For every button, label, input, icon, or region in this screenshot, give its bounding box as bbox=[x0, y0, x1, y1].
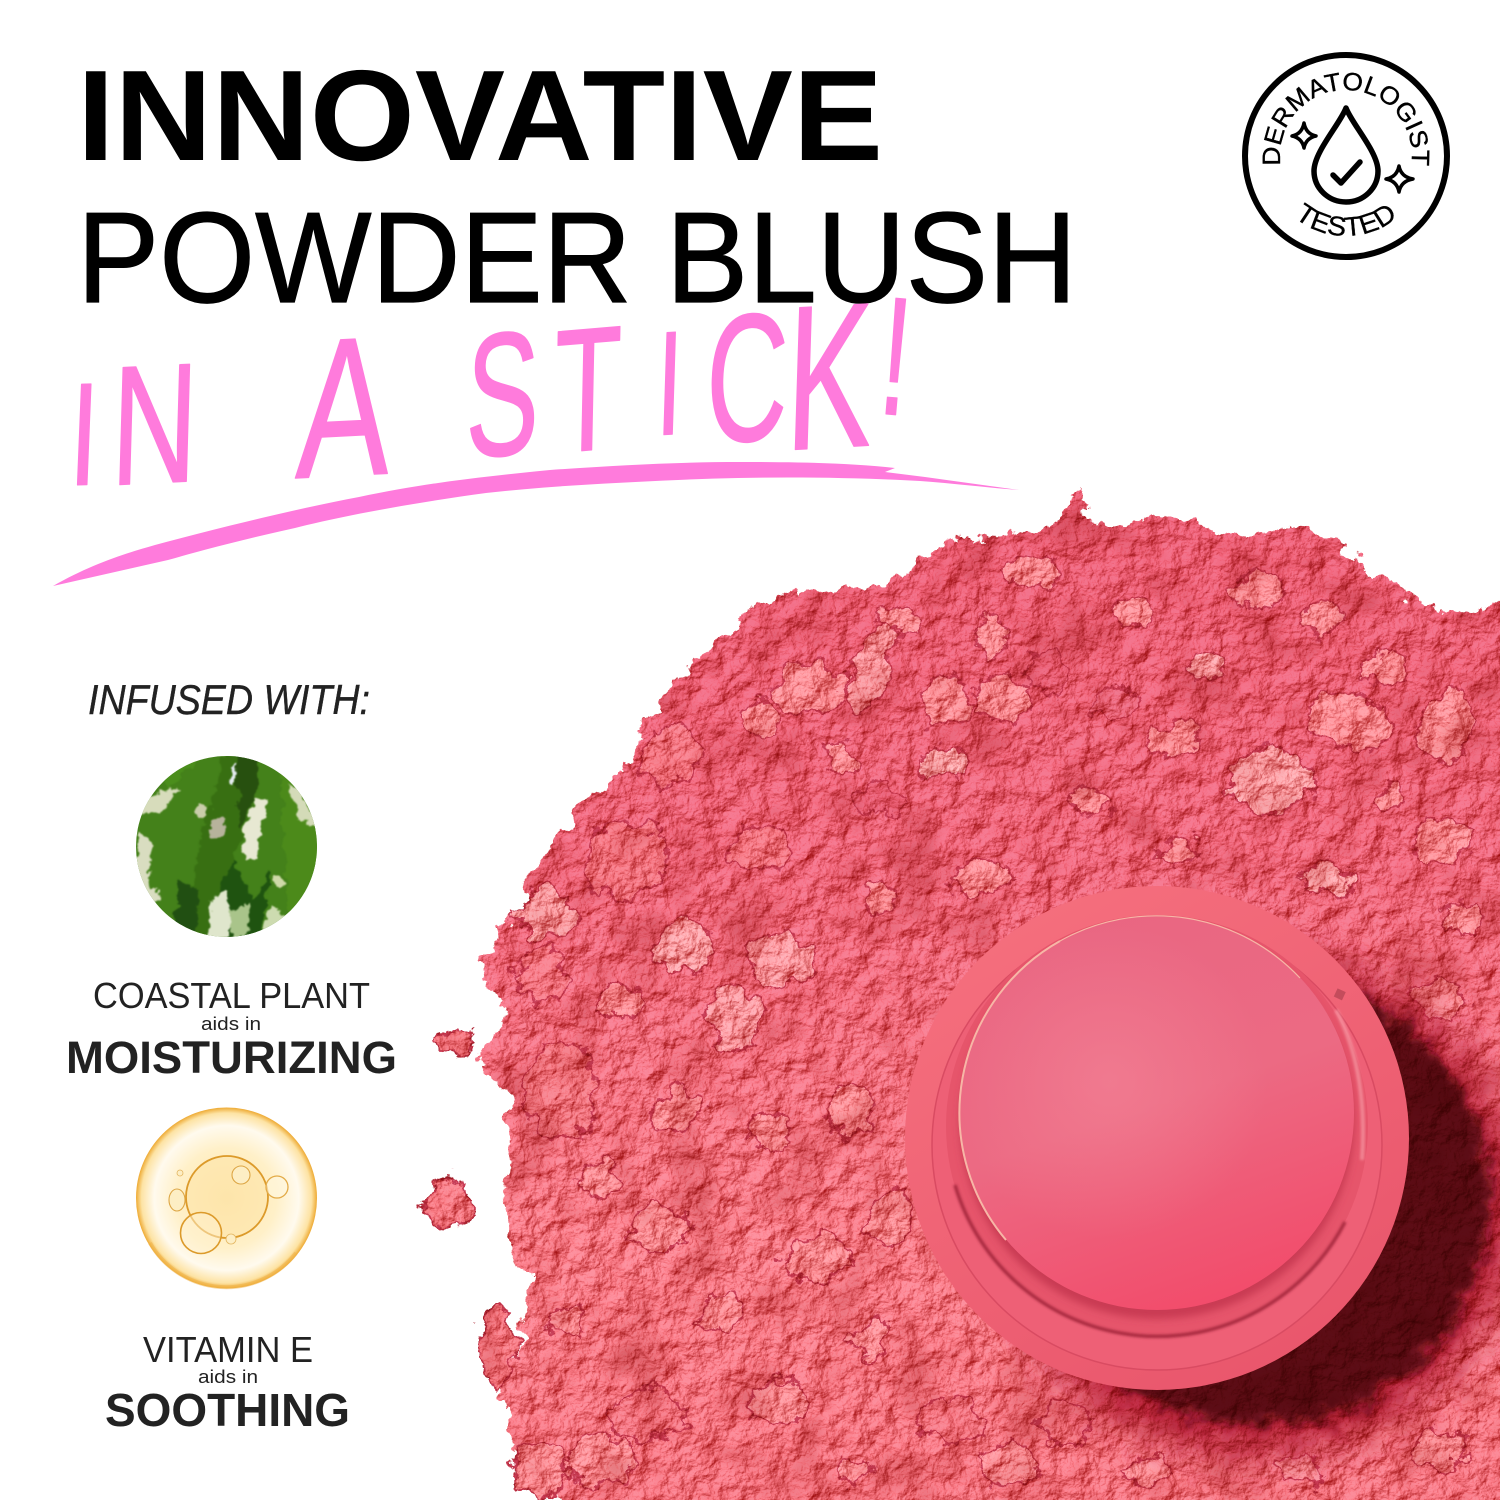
script word: stick: I bbox=[651, 300, 689, 467]
script word: stick: S bbox=[458, 294, 548, 496]
headline line 1: INNOVATIVE bbox=[77, 44, 883, 188]
script word: in: N bbox=[104, 328, 205, 522]
benefit: SOOTHING bbox=[105, 1384, 350, 1436]
benefit: MOISTURIZING bbox=[66, 1032, 397, 1083]
label: coastal plant bbox=[66, 975, 397, 1083]
icon: sparkle right bbox=[1386, 166, 1413, 192]
badge top text: DERMATOLOGIST bbox=[1262, 72, 1430, 166]
connector text: aids in bbox=[198, 1367, 258, 1387]
icon: sparkle left bbox=[1292, 123, 1316, 148]
brush underline bbox=[53, 462, 1019, 586]
icon: check mark bbox=[1333, 162, 1360, 183]
script word: stick: K bbox=[778, 260, 881, 494]
product: blush stick top view bbox=[905, 886, 1409, 1390]
ingredient: coastal plant photo bbox=[136, 756, 317, 937]
script word: stick: ! bbox=[873, 261, 918, 451]
script word: a: A bbox=[288, 295, 401, 521]
script word: stick: C bbox=[699, 275, 796, 483]
product shadow bbox=[993, 955, 1500, 1455]
outer base ring bbox=[905, 886, 1409, 1390]
badge bottom text: TESTED bbox=[1300, 202, 1394, 236]
connector text: aids in bbox=[201, 1014, 261, 1034]
top disc with gradient bbox=[960, 916, 1354, 1310]
headline line 2: POWDER BLUSH bbox=[77, 186, 1077, 330]
ingredient: vitamin e oil drop bbox=[136, 1108, 317, 1288]
script word: in: I bbox=[65, 352, 104, 516]
powder pile bbox=[417, 495, 1500, 1500]
ingredient name: COASTAL PLANT bbox=[93, 975, 370, 1016]
infused with heading: INFUSED WITH: bbox=[88, 676, 370, 723]
icon: water drop bbox=[1314, 108, 1378, 202]
headline bbox=[77, 44, 1077, 330]
ingredient name: VITAMIN E bbox=[143, 1329, 313, 1370]
badge: dermatologist tested bbox=[1242, 52, 1450, 260]
script word: stick: T bbox=[546, 289, 630, 491]
label: vitamin e bbox=[105, 1329, 350, 1436]
script heading: in a stick bbox=[64, 260, 918, 522]
